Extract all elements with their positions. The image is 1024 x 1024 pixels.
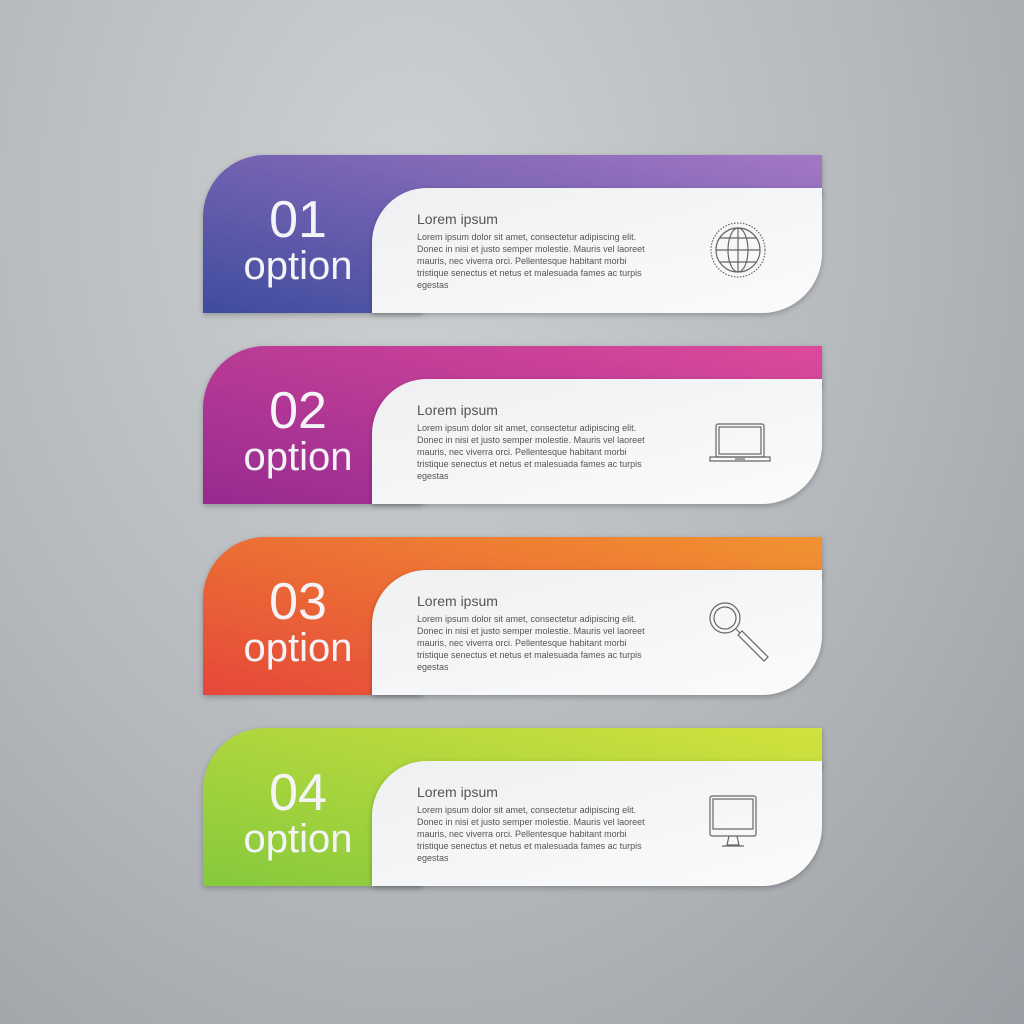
colored band 01 xyxy=(203,155,822,313)
body text: Lorem ipsum dolor sit amet, consectetur adipiscing elit. xyxy=(417,423,636,433)
body text: Lorem ipsum dolor sit amet, consectetur adipiscing elit. xyxy=(417,232,636,242)
colored band 03 xyxy=(203,537,822,695)
number 01: 01 xyxy=(269,191,327,249)
panel: option 04 xyxy=(203,728,822,886)
label option: option xyxy=(244,626,352,670)
icon: globe xyxy=(711,223,765,277)
body text: Lorem ipsum dolor sit amet, consectetur adipiscing elit. xyxy=(417,805,636,815)
white card 01 xyxy=(372,188,822,313)
colored band 04 xyxy=(203,728,822,886)
panel: option 01 xyxy=(203,155,822,313)
body text: mauris, nec viverra orci. Pellentesque habitant morbi xyxy=(417,447,627,457)
white card 02 xyxy=(372,379,822,504)
heading: Lorem ipsum xyxy=(417,211,498,227)
heading: Lorem ipsum xyxy=(417,593,498,609)
heading: Lorem ipsum xyxy=(417,402,498,418)
body text: tristique senectus et netus et malesuada fames ac turpis xyxy=(417,650,642,660)
icon: monitor xyxy=(710,796,756,846)
body text xyxy=(417,423,645,481)
body text: mauris, nec viverra orci. Pellentesque habitant morbi xyxy=(417,256,627,266)
body text: mauris, nec viverra orci. Pellentesque habitant morbi xyxy=(417,829,627,839)
body text: tristique senectus et netus et malesuada fames ac turpis xyxy=(417,268,642,278)
body text: Donec in nisi et justo semper molestie. Mauris vel laoreet xyxy=(417,244,645,254)
body text xyxy=(417,614,645,672)
body text: Donec in nisi et justo semper molestie. Mauris vel laoreet xyxy=(417,817,645,827)
number 04: 04 xyxy=(269,764,327,822)
body text: Lorem ipsum dolor sit amet, consectetur adipiscing elit. xyxy=(417,614,636,624)
body text: Donec in nisi et justo semper molestie. Mauris vel laoreet xyxy=(417,626,645,636)
icon: laptop xyxy=(710,424,770,461)
label option: option xyxy=(244,244,352,288)
body text: Donec in nisi et justo semper molestie. Mauris vel laoreet xyxy=(417,435,645,445)
white card 04 xyxy=(372,761,822,886)
body text: egestas xyxy=(417,853,449,863)
body text: tristique senectus et netus et malesuada fames ac turpis xyxy=(417,841,642,851)
body text: egestas xyxy=(417,280,449,290)
body text: egestas xyxy=(417,662,449,672)
white card 03 xyxy=(372,570,822,695)
label option: option xyxy=(244,435,352,479)
panel: option 02 xyxy=(203,346,822,504)
number 03: 03 xyxy=(269,573,327,631)
number 02: 02 xyxy=(269,382,327,440)
label option: option xyxy=(244,817,352,861)
icon: magnifier xyxy=(710,603,768,661)
body text xyxy=(417,232,645,290)
heading: Lorem ipsum xyxy=(417,784,498,800)
body text: tristique senectus et netus et malesuada fames ac turpis xyxy=(417,459,642,469)
body text xyxy=(417,805,645,863)
colored band 02 xyxy=(203,346,822,504)
body text: mauris, nec viverra orci. Pellentesque habitant morbi xyxy=(417,638,627,648)
panel: option 03 xyxy=(203,537,822,695)
body text: egestas xyxy=(417,471,449,481)
